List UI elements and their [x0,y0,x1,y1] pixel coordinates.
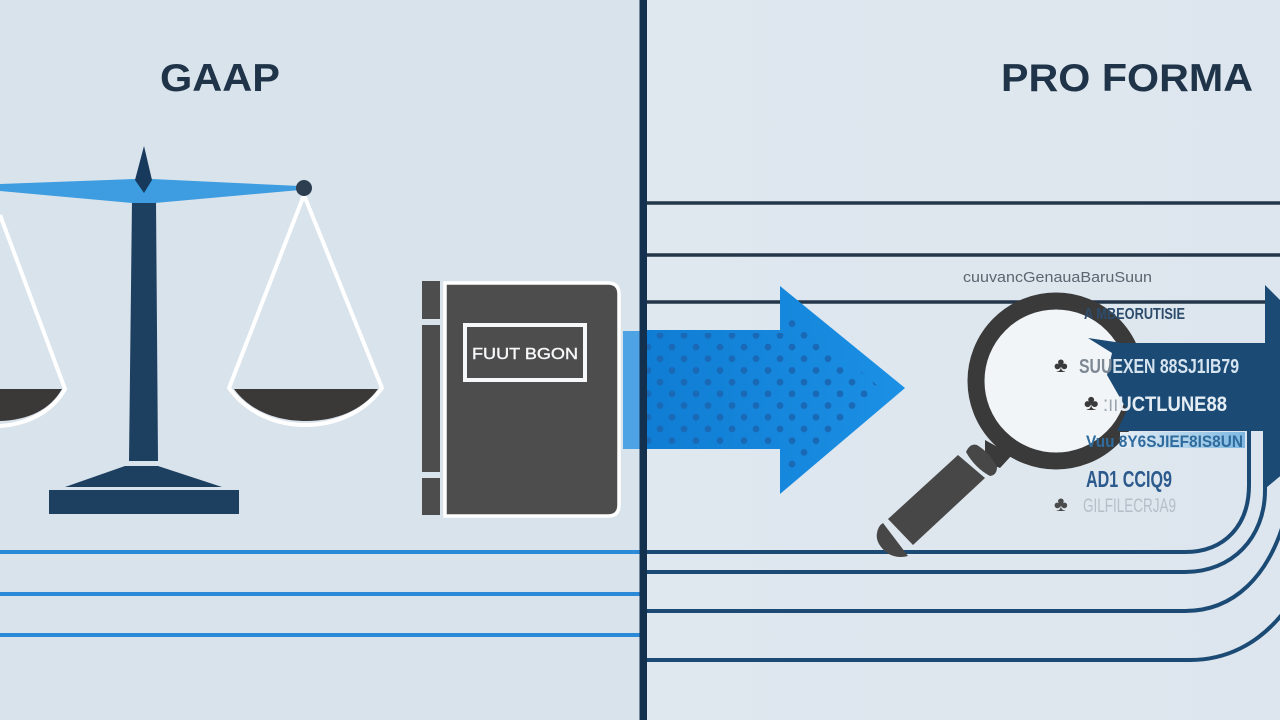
arrow: blue transition arrow [623,286,905,494]
scale right pan [229,195,382,425]
icon: rule book [422,281,619,516]
list item 4: Vuu 8Y6SJIEF8IS8UN [1086,432,1243,451]
curved flow lines [647,431,1280,660]
arrow: navy output arrow [1088,285,1280,488]
scale pivot [296,180,312,196]
list item 3: ♣ [1084,390,1098,415]
scale mast [129,200,158,461]
heading: GAAP: GAAP [160,57,280,100]
list item 5: AD1 CCIQ9 [1086,466,1172,492]
heading: PRO FORMA: PRO FORMA [1001,57,1253,100]
panel: Pro Forma background [640,0,1280,720]
list item 6: GILFILECRJA9 [1083,496,1176,517]
scale left pan [0,215,65,426]
list item 1: A MBEORUTISIE [1084,306,1185,323]
list item 2: SUUEXEN 88SJ1IB79 [1079,356,1239,378]
divider [640,0,647,720]
icon: balance scale [0,146,382,514]
book cover [445,283,619,516]
scale beam [0,179,300,203]
text block: findings list [963,269,1243,517]
highlight band [1120,432,1245,448]
book label [465,325,585,380]
list item 3: :ııUCTLUNE88 [1103,393,1227,416]
list item 2 [1054,354,1239,378]
list item 6 [1054,493,1176,517]
magnifier handle [877,440,1012,557]
panel: GAAP background [0,0,640,720]
decorative lines [647,203,1280,302]
book spine [422,281,440,515]
book label: FUUT BGON [472,346,578,363]
scale finial [135,146,152,193]
scale base [49,466,239,514]
list header: cuuvancGenauaBaruSuun [963,269,1152,286]
magnifier lens [976,301,1136,461]
list item 6: ♣ [1054,493,1068,516]
icon: magnifying glass [877,301,1136,557]
list item 2: ♣ [1054,354,1068,377]
